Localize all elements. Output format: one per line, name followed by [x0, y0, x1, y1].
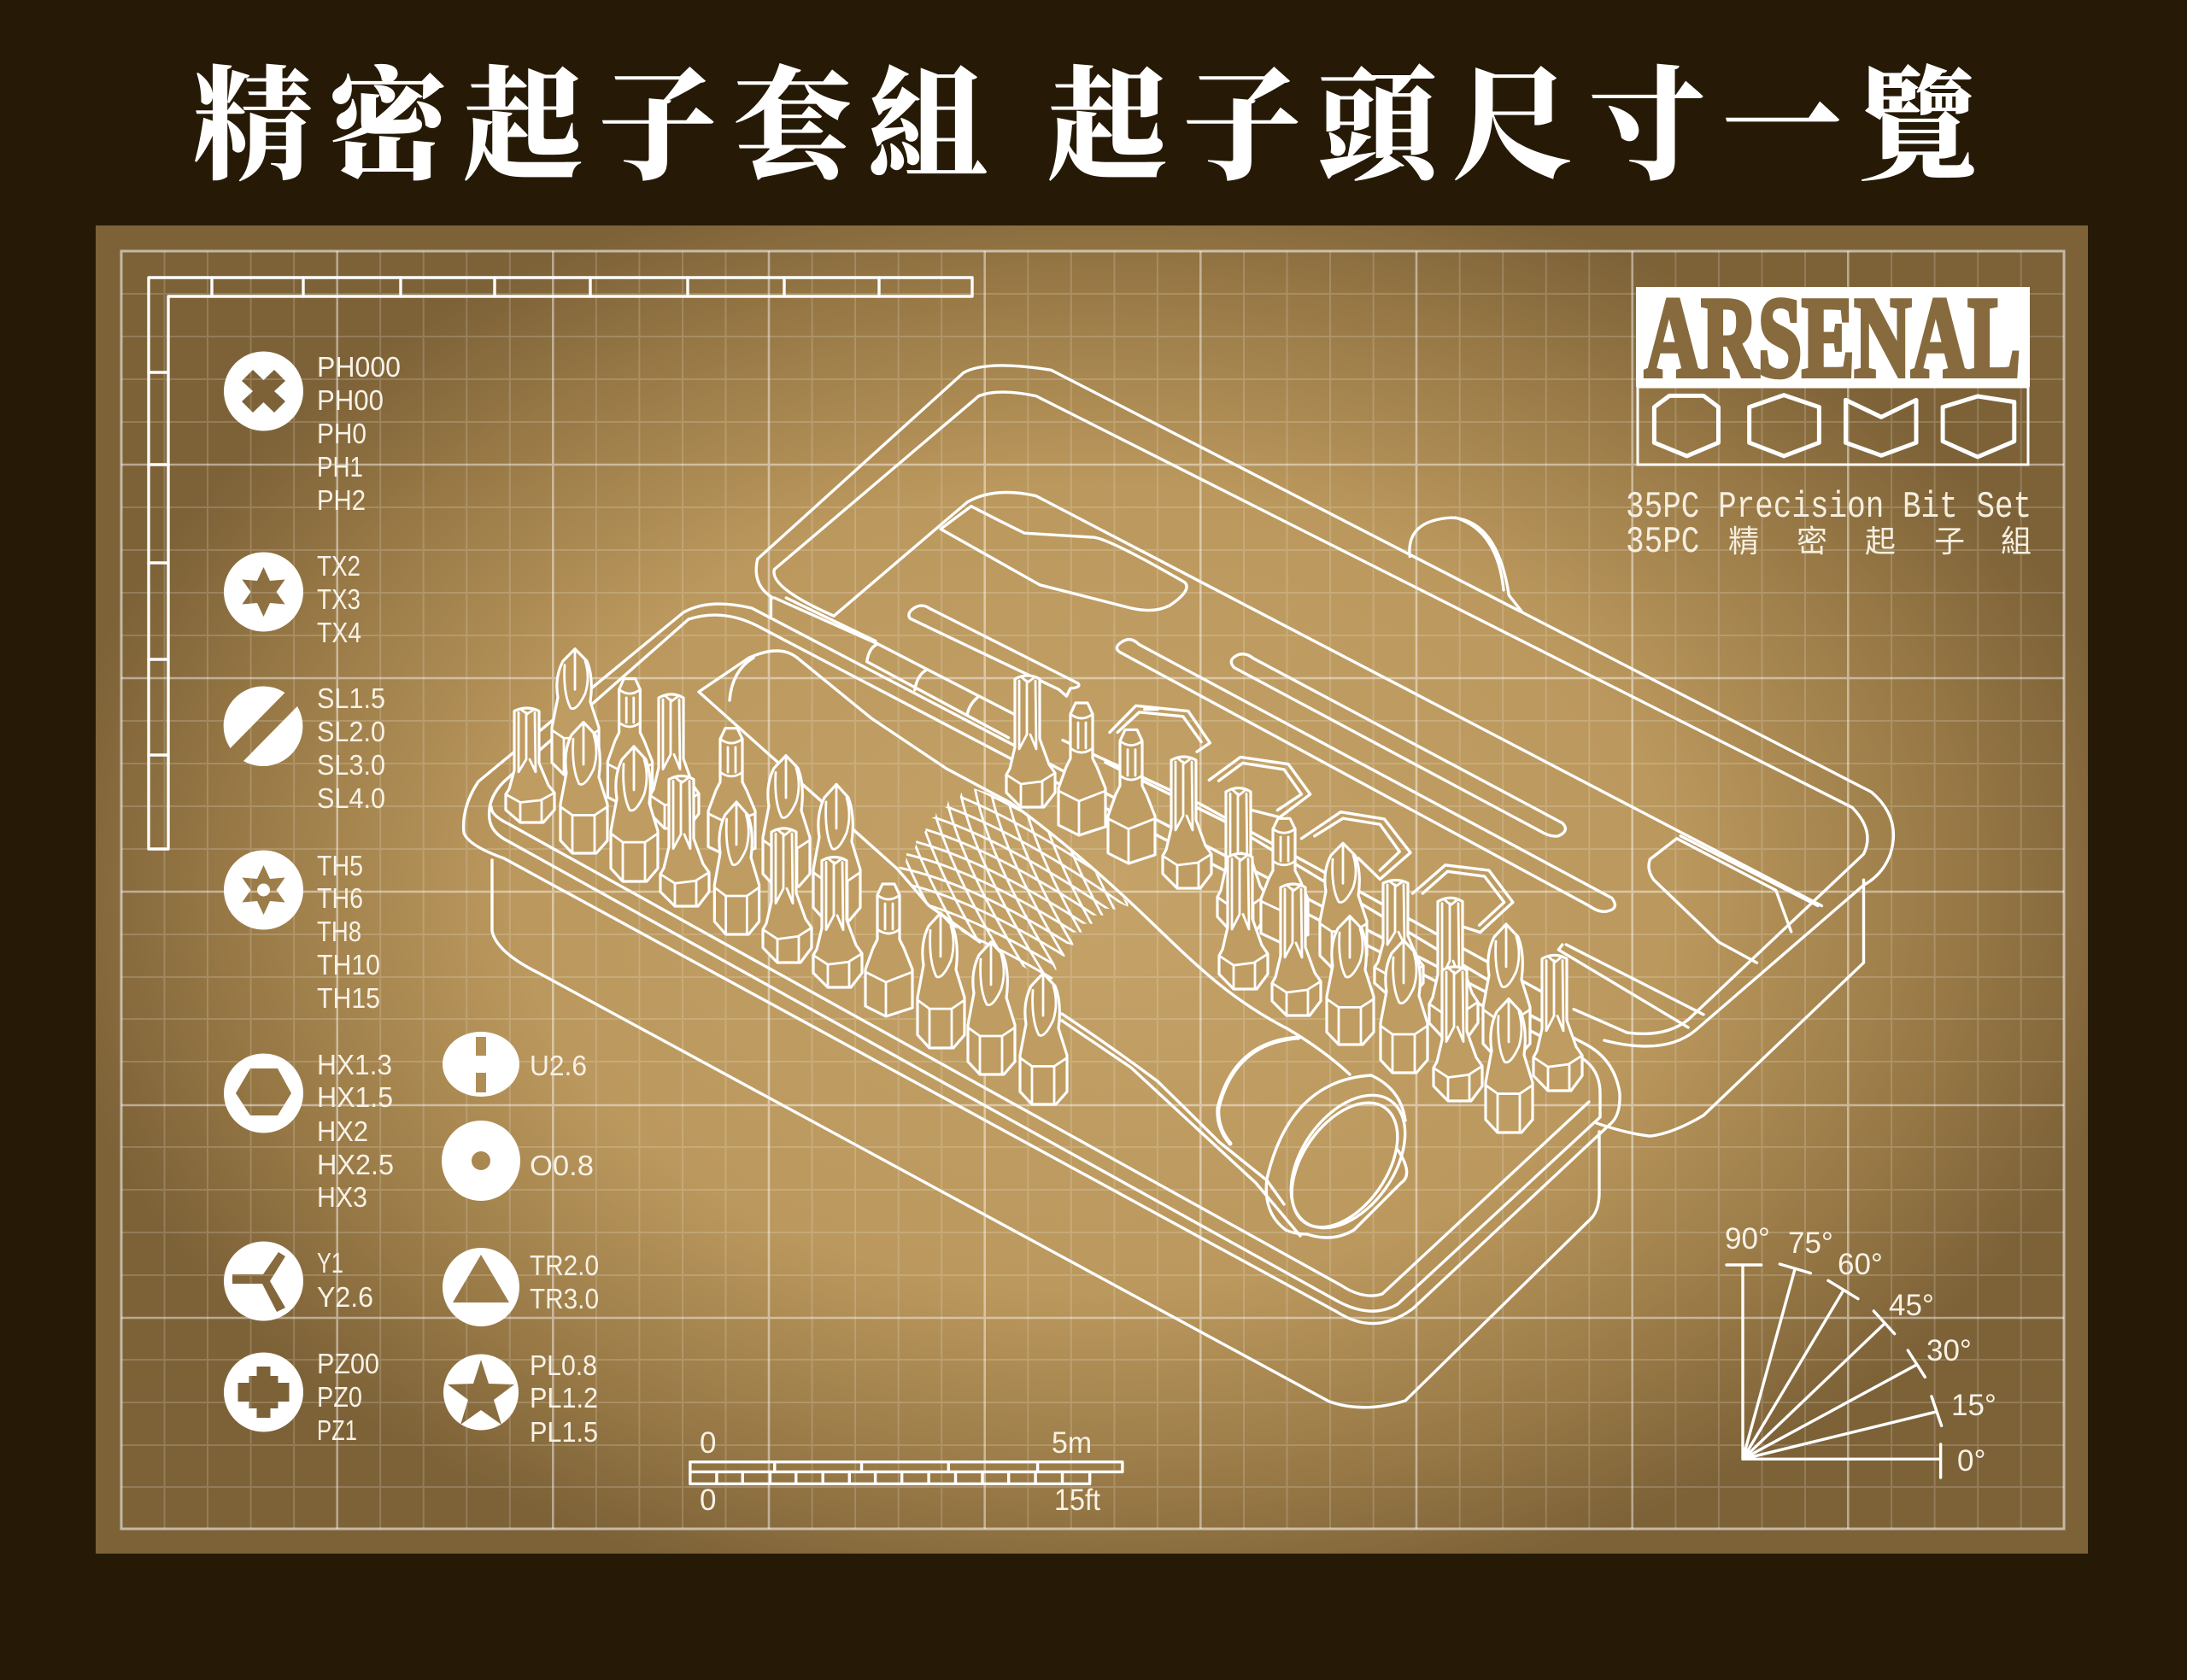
labels: pozidriv sizes: PZ1: [317, 1414, 357, 1446]
logo lower box: [1638, 387, 2028, 465]
labels: security torx sizes: TH10: [317, 949, 380, 980]
panel background: [96, 225, 2088, 1554]
scale bar: [690, 1426, 1123, 1517]
labels: pentalobe sizes: PL0.8: [530, 1349, 597, 1381]
panel: blueprint sheet: [96, 225, 2088, 1554]
angle labels: 15°: [1951, 1389, 1996, 1422]
product name: 精密起子組: [1728, 524, 2032, 561]
labels: torx sizes: TX3: [317, 583, 361, 615]
hex recesses in lid: [1110, 705, 1513, 933]
logo wordmark: ARSENAL: [1645, 274, 2020, 401]
product name: [1626, 486, 2032, 563]
labels: tri-wing sizes: Y1: [317, 1247, 343, 1279]
icon: torx: [224, 552, 303, 632]
labels: hex sizes: [317, 1049, 394, 1213]
angle labels: 90°: [1725, 1222, 1770, 1256]
angle gauge: [1725, 1222, 1996, 1478]
labels: slotted sizes: SL3.0: [317, 749, 385, 781]
angle labels: 45°: [1889, 1289, 1934, 1322]
tray rims: [464, 604, 1620, 1408]
scale labels: 15ft: [1054, 1484, 1100, 1517]
labels: phillips sizes: PH0: [317, 418, 366, 449]
labels: pozidriv sizes: PZ00: [317, 1348, 379, 1379]
icon: slotted: [224, 686, 302, 766]
labels: security torx sizes: TH5: [317, 850, 363, 881]
angle labels: 30°: [1926, 1334, 1972, 1367]
labels: hex sizes: HX2.5: [317, 1149, 394, 1180]
angle labels: [1725, 1222, 1996, 1478]
product name: 35PC: [1626, 521, 1699, 563]
labels: phillips sizes: [317, 351, 401, 516]
label: u-type: U2.6: [530, 1050, 587, 1081]
knurled grip: [899, 789, 1129, 980]
corner ruler: [149, 278, 972, 849]
screwdriver handle: [699, 651, 1350, 1236]
labels: triangle sizes: TR2.0: [530, 1250, 599, 1281]
labels: pentalobe sizes: [530, 1349, 598, 1448]
icon: tri-wing: [224, 1242, 303, 1320]
labels: pentalobe sizes: PL1.2: [530, 1382, 598, 1414]
angle labels: 0°: [1957, 1444, 1985, 1478]
title: 精密起子套組 起子頭尺寸一覽: [193, 59, 1992, 196]
scale labels: 0: [700, 1426, 716, 1460]
bits: left rack: [506, 649, 1067, 1104]
case lid: [756, 366, 1893, 1136]
logo hexagon marks: [1654, 395, 2014, 457]
labels: phillips sizes: PH00: [317, 384, 384, 416]
labels: slotted sizes: [317, 682, 385, 814]
icon: security torx: [224, 851, 303, 929]
angle rays: [1727, 1264, 1942, 1478]
logo plate: [1636, 287, 2030, 387]
hinge rod: [771, 598, 1015, 738]
product name: 35PC Precision Bit Set: [1626, 486, 2032, 528]
icon: u-type: [443, 1032, 519, 1097]
labels: pentalobe sizes: PL1.5: [530, 1416, 598, 1448]
logo: ARSENAL: [1636, 274, 2030, 465]
labels: security torx sizes: [317, 850, 380, 1014]
labels: security torx sizes: TH15: [317, 982, 380, 1014]
labels: security torx sizes: TH6: [317, 882, 363, 914]
labels: phillips sizes: PH000: [317, 351, 401, 383]
labels: phillips sizes: PH2: [317, 484, 366, 516]
labels: slotted sizes: SL1.5: [317, 682, 385, 714]
icon: pozidriv: [224, 1353, 303, 1431]
labels: slotted sizes: SL2.0: [317, 716, 385, 747]
labels: slotted sizes: SL4.0: [317, 782, 385, 814]
labels: hex sizes: HX3: [317, 1181, 367, 1213]
label: round pin: O0.8: [530, 1150, 594, 1181]
scale labels: 5m: [1052, 1426, 1092, 1460]
labels: torx sizes: [317, 550, 361, 648]
scale labels: [700, 1426, 1100, 1517]
icon: phillips: [224, 352, 303, 430]
scale bar graphic: [690, 1462, 1123, 1484]
icon: pentalobe star: [443, 1355, 519, 1431]
blueprint grid: [121, 251, 2064, 1529]
icon: triangle: [443, 1248, 519, 1326]
labels: hex sizes: HX1.5: [317, 1081, 393, 1113]
handle cap: [1218, 1038, 1428, 1249]
labels: hex sizes: HX2: [317, 1115, 368, 1147]
labels: triangle sizes: [530, 1250, 599, 1314]
labels: pozidriv sizes: [317, 1348, 379, 1446]
icon: hex: [224, 1054, 303, 1133]
labels: pozidriv sizes: PZ0: [317, 1381, 362, 1413]
labels: torx sizes: TX2: [317, 550, 361, 582]
labels: triangle sizes: TR3.0: [530, 1283, 599, 1314]
labels: phillips sizes: PH1: [317, 451, 363, 483]
icon: round pin: [442, 1121, 520, 1201]
illustration: open bit-set case: [464, 366, 1893, 1408]
labels: tri-wing sizes: [317, 1247, 373, 1313]
labels: tri-wing sizes: Y2.6: [317, 1281, 373, 1313]
angle labels: 60°: [1838, 1248, 1883, 1281]
labels: security torx sizes: TH8: [317, 916, 361, 947]
labels: hex sizes: HX1.3: [317, 1049, 392, 1080]
labels: torx sizes: TX4: [317, 617, 361, 648]
angle labels: 75°: [1788, 1226, 1833, 1260]
bits: right rack: [1006, 676, 1582, 1133]
scale labels: 0: [700, 1484, 716, 1517]
